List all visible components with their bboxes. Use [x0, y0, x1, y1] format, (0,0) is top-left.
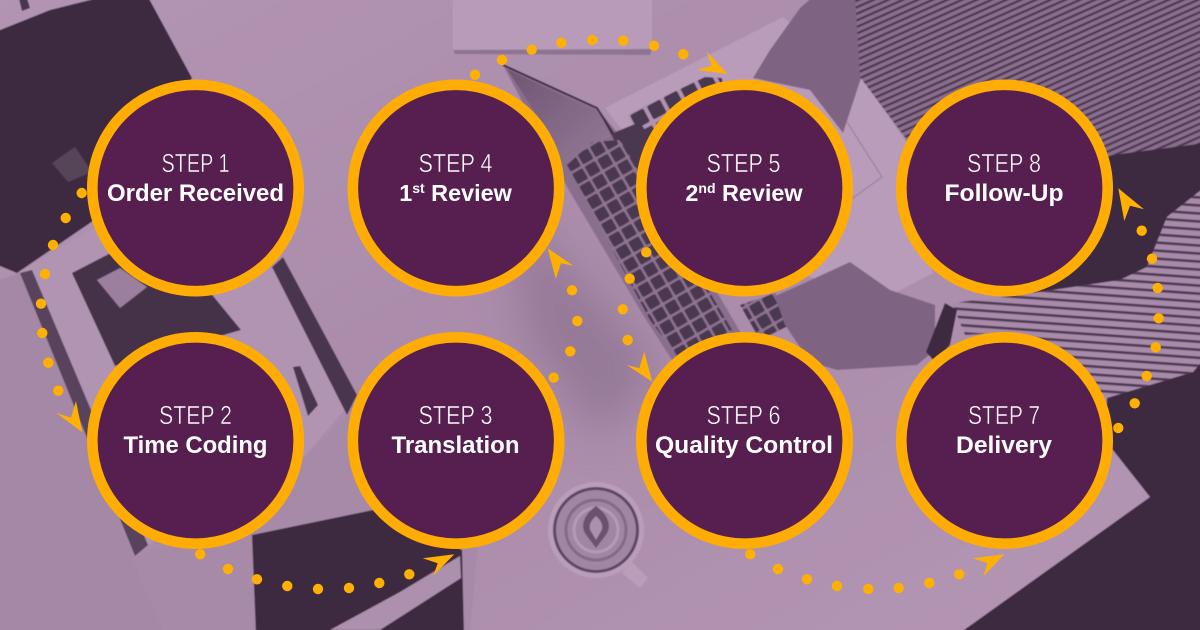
tablet lower — [252, 510, 464, 630]
step 8: follow-up — [901, 85, 1108, 291]
laptop screen — [507, 69, 612, 163]
step 3: translation: Translation — [392, 432, 520, 459]
second keyboard silver — [605, 17, 933, 293]
step 2: time coding: STEP 2 — [159, 400, 232, 430]
step 6: quality control — [641, 337, 848, 544]
laptop screen top edge — [503, 65, 613, 133]
laptop hinge dark band — [597, 108, 720, 270]
dotted arrow: step 3 to step 4 — [548, 248, 582, 383]
step 5: second review: nd — [698, 180, 716, 196]
tray dark edge right — [272, 257, 357, 415]
step 4: first review — [353, 85, 559, 291]
step 8: follow-up: STEP 8 — [967, 148, 1041, 178]
step 7: delivery — [901, 337, 1108, 544]
notebook — [453, 0, 652, 50]
dotted arrow: step 1 to step 2 — [36, 188, 87, 432]
step 1: order received: STEP 1 — [162, 148, 230, 178]
lower panel — [133, 415, 480, 630]
step 4: first review: st — [412, 180, 425, 196]
top left strip — [18, 0, 30, 11]
second keyboard keys — [628, 77, 724, 145]
lower hand — [775, 262, 935, 370]
step 7: delivery: Delivery — [956, 432, 1053, 459]
step 1: order received: Order Received — [107, 180, 284, 207]
step 4: first review: 1 — [399, 180, 412, 206]
tablet silver edge — [330, 556, 461, 630]
dotted arrow: step 4 to step 5 — [470, 35, 728, 80]
watch — [926, 303, 957, 362]
trackpad line — [847, 122, 882, 200]
desk left wedge — [0, 272, 165, 630]
step 5: second review: 2 — [685, 180, 698, 206]
keyboard near hand — [740, 293, 790, 340]
dotted arrow: step 6 to step 7 — [745, 549, 1004, 594]
cisco logo plate — [52, 147, 92, 182]
shirt — [855, 0, 1200, 160]
laptop body — [503, 65, 745, 360]
step 4: first review: Review — [425, 180, 513, 206]
keyboard keys — [567, 140, 735, 360]
step 3: translation: STEP 3 — [418, 400, 492, 430]
dark folder top left — [0, 0, 192, 273]
coffee saucer and cup — [548, 482, 648, 588]
step 7: delivery: STEP 7 — [968, 400, 1040, 430]
sleeve cuff — [952, 187, 1200, 398]
desk phone — [72, 243, 241, 366]
step 2: time coding: Time Coding — [124, 432, 268, 459]
step 4: first review: STEP 4 — [418, 148, 492, 178]
step 8: follow-up: Follow-Up — [944, 180, 1064, 207]
step 6: quality control: STEP 6 — [706, 400, 780, 430]
table shading beside laptop — [500, 190, 660, 440]
dotted arrow: step 2 to step 3 — [195, 549, 454, 594]
step 1: order received — [92, 85, 299, 291]
tray dark edge left — [20, 270, 148, 556]
step 3: translation — [353, 337, 559, 544]
step 6: quality control: Quality Control — [655, 432, 833, 459]
dotted arrow: step 7 to step 8 — [1113, 188, 1164, 433]
dark shadow under arm — [1000, 143, 1200, 293]
dark floor lower right — [957, 358, 1200, 630]
step 5: second review: Review — [716, 180, 803, 206]
tray panel — [20, 225, 357, 545]
phone screen — [97, 268, 147, 308]
pen slot — [293, 366, 318, 416]
dotted arrow: step 5 to step 6 — [618, 247, 652, 382]
step 5: second review — [641, 85, 848, 291]
step 2: time coding — [92, 337, 299, 544]
step 5: second review: STEP 5 — [706, 148, 780, 178]
top hand — [753, 0, 862, 133]
